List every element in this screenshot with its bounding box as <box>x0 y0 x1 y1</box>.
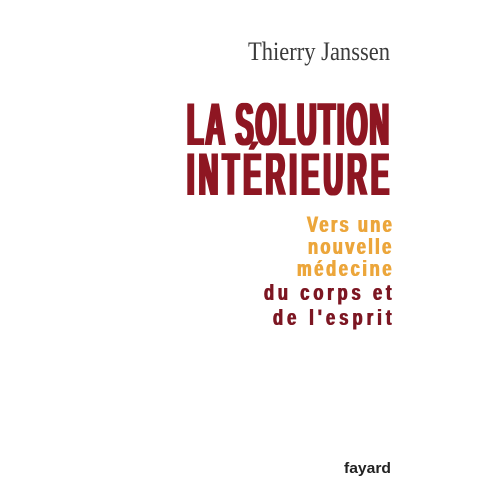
publisher: fayard <box>344 460 391 477</box>
subtitle: orange lines: médecine <box>297 257 392 282</box>
title: INTÉRIEURE <box>187 141 389 208</box>
subtitle: orange lines: nouvelle <box>308 235 391 260</box>
title: LA SOLUTION <box>187 91 389 158</box>
subtitle: dark red lines: de l'esprit <box>273 306 392 331</box>
title <box>187 91 389 208</box>
subtitle: dark red lines: du corps et <box>264 281 392 306</box>
subtitle: orange lines: Vers une <box>307 213 392 238</box>
author name: Thierry Janssen <box>248 37 390 66</box>
subtitle: orange lines <box>297 213 392 282</box>
subtitle: dark red lines <box>264 281 392 331</box>
